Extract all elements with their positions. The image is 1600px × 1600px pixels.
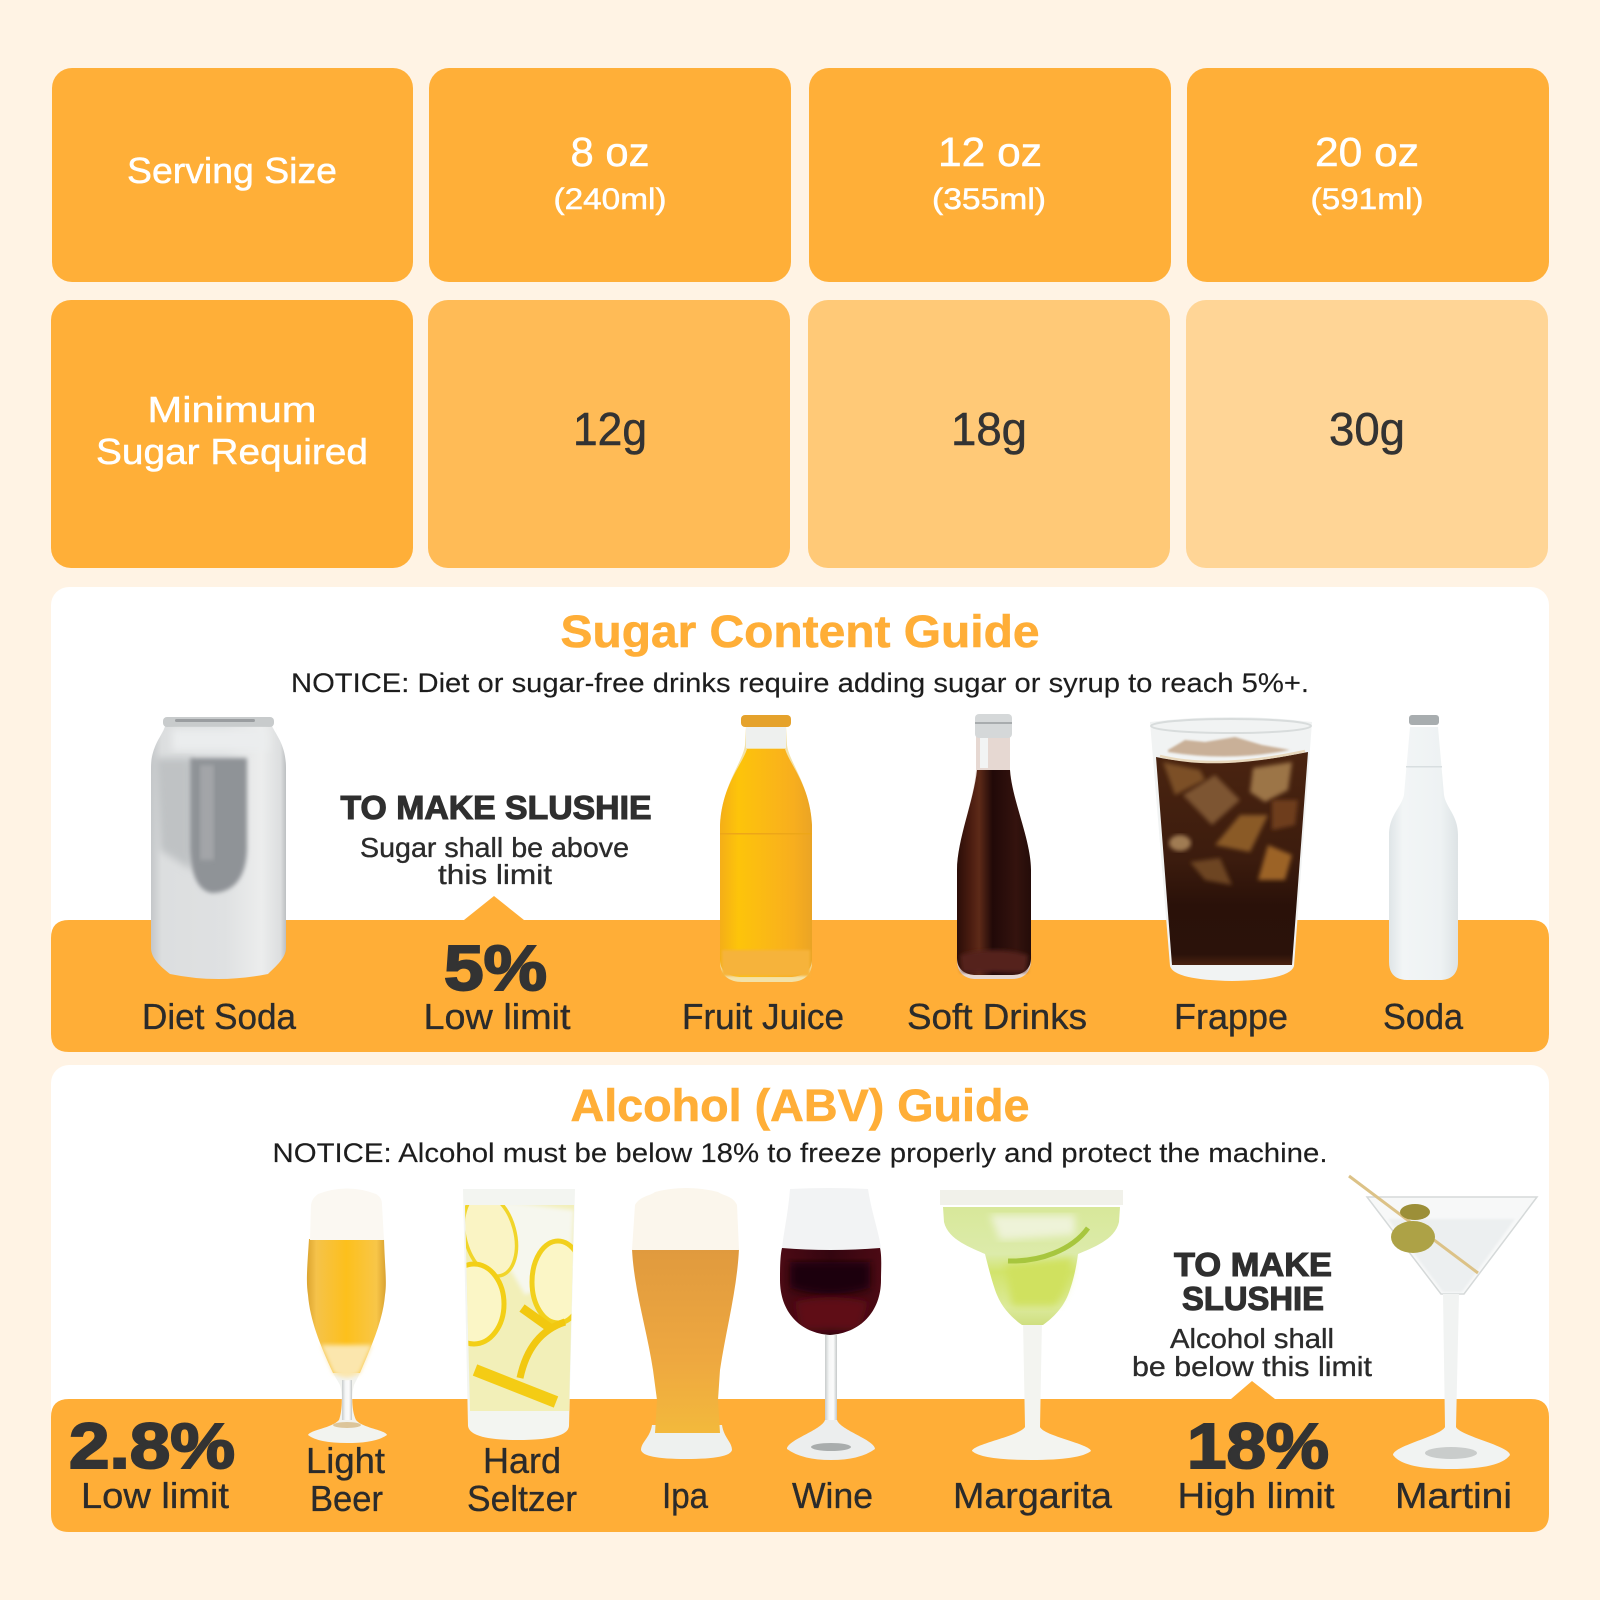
cell: 8 oz: (240ml) bbox=[554, 183, 666, 216]
cell: serving size label bbox=[52, 68, 413, 282]
cell: minimum sugar label bbox=[51, 300, 413, 568]
icon: frappe glass bbox=[1150, 717, 1312, 981]
label: light beer: Light bbox=[306, 1440, 385, 1481]
sugar band with pointer bbox=[51, 896, 1549, 1052]
cell: 12 oz: (355ml) bbox=[932, 183, 1046, 216]
cell: 12g bbox=[428, 300, 790, 568]
label: soda: Soda bbox=[1383, 996, 1464, 1037]
panel: sugar content guide bbox=[51, 587, 1549, 1052]
cell: 20 oz: (591ml) bbox=[1310, 183, 1424, 216]
cell: 8 oz bbox=[429, 68, 791, 282]
cell: 20 oz: 20 oz bbox=[1315, 129, 1419, 175]
labels: alcohol drinks bbox=[306, 1440, 1512, 1519]
label: light beer bbox=[306, 1440, 385, 1519]
label: soft drinks: Soft Drinks bbox=[907, 996, 1087, 1037]
callout: to make slushie (alcohol): Alcohol shall bbox=[1170, 1323, 1334, 1354]
callout: to make slushie (alcohol): be below this limit bbox=[1132, 1351, 1372, 1382]
icon: margarita glass bbox=[940, 1190, 1123, 1460]
label: hard seltzer: Hard bbox=[483, 1440, 561, 1481]
icon: soda bottle bbox=[1389, 715, 1458, 980]
stat: 18% high limit bbox=[1178, 1410, 1334, 1516]
icon: light beer glass bbox=[307, 1188, 387, 1443]
stat: 2.8% low limit: 2.8% bbox=[69, 1410, 235, 1482]
label: frappe: Frappe bbox=[1174, 996, 1288, 1037]
stat: 5% low limit: 5% bbox=[444, 932, 547, 1004]
cell: 18g: 18g bbox=[951, 403, 1027, 455]
heading: sugar content guide: Sugar Content Guide bbox=[560, 606, 1040, 657]
stat: 18% high limit: 18% bbox=[1187, 1410, 1329, 1482]
callout: to make slushie (alcohol) bbox=[1132, 1246, 1372, 1382]
cell: 30g: 30g bbox=[1329, 403, 1405, 455]
cell: minimum sugar label: Minimum bbox=[148, 389, 316, 430]
cell: 8 oz: 8 oz bbox=[570, 129, 650, 175]
label: martini: Martini bbox=[1395, 1475, 1512, 1516]
label: ipa: Ipa bbox=[662, 1475, 709, 1516]
cell: 12g: 12g bbox=[573, 403, 647, 455]
cell: 18g bbox=[808, 300, 1170, 568]
icon: martini glass bbox=[1349, 1176, 1537, 1469]
stat: 18% high limit: High limit bbox=[1178, 1475, 1334, 1516]
cell: 12 oz bbox=[809, 68, 1171, 282]
cell: 12 oz: 12 oz bbox=[938, 129, 1042, 175]
heading: alcohol guide: Alcohol (ABV) Guide bbox=[570, 1080, 1030, 1131]
label: wine: Wine bbox=[792, 1475, 873, 1516]
label: fruit juice: Fruit Juice bbox=[682, 996, 844, 1037]
alcohol band with pointer bbox=[51, 1381, 1549, 1532]
label: diet soda: Diet Soda bbox=[142, 996, 297, 1037]
label: hard seltzer bbox=[467, 1440, 577, 1519]
table: serving size and minimum sugar bbox=[51, 68, 1549, 568]
callout: to make slushie (sugar): TO MAKE SLUSHIE bbox=[340, 789, 652, 826]
icon: diet soda can bbox=[151, 717, 286, 979]
cell: 30g bbox=[1186, 300, 1548, 568]
cell: serving size label: Serving Size bbox=[127, 150, 337, 191]
stat: 2.8% low limit bbox=[69, 1410, 235, 1516]
cell: minimum sugar label: Sugar Required bbox=[96, 431, 368, 472]
stat: 5% low limit: Low limit bbox=[424, 996, 570, 1037]
label: margarita: Margarita bbox=[953, 1475, 1113, 1516]
callout: to make slushie (sugar): this limit bbox=[438, 859, 552, 890]
stat: 2.8% low limit: Low limit bbox=[81, 1475, 229, 1516]
icon: ipa glass bbox=[632, 1188, 739, 1459]
panel: alcohol guide bbox=[51, 1065, 1549, 1532]
icon: wine glass bbox=[778, 1188, 884, 1460]
icon: fruit juice bottle bbox=[720, 715, 812, 982]
callout: to make slushie (alcohol): SLUSHIE bbox=[1182, 1280, 1324, 1317]
icon: soft drink bottle bbox=[957, 714, 1031, 979]
icon: hard seltzer glass bbox=[463, 1189, 575, 1440]
label: hard seltzer: Seltzer bbox=[467, 1478, 577, 1519]
labels: sugar drinks bbox=[142, 996, 1464, 1037]
cell: 20 oz bbox=[1187, 68, 1549, 282]
callout: to make slushie (sugar) bbox=[340, 789, 652, 890]
notice: alcohol: NOTICE: Alcohol must be below 18% to freeze properly and protect the machine. bbox=[272, 1138, 1328, 1168]
callout: to make slushie (alcohol): TO MAKE bbox=[1174, 1246, 1332, 1283]
callout: to make slushie (sugar): Sugar shall be above bbox=[360, 832, 629, 863]
stat: 5% low limit bbox=[424, 932, 570, 1037]
notice: sugar: NOTICE: Diet or sugar-free drinks require adding sugar or syrup to reach 5%+. bbox=[291, 668, 1309, 698]
label: light beer: Beer bbox=[310, 1478, 383, 1519]
